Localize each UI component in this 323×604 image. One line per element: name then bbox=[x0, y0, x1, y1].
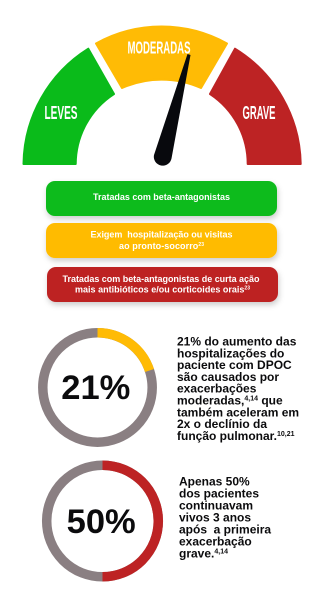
donut chart: 21% bbox=[43, 333, 152, 442]
text: grave bbox=[62, 274, 260, 294]
donut chart: 50% bbox=[47, 465, 158, 577]
text: 50% explanation: continuavam bbox=[179, 499, 253, 513]
gauge needle bbox=[154, 54, 190, 166]
text: 50% explanation bbox=[179, 475, 271, 560]
text: 21% explanation: que bbox=[258, 394, 283, 408]
value: 50%: 50% bbox=[67, 503, 136, 541]
text: 50% explanation: Apenas 50% bbox=[179, 475, 250, 489]
text: 21% explanation: também aceleram em bbox=[177, 405, 299, 419]
label: moderadas: MODERADAS bbox=[128, 38, 190, 58]
text: 21% explanation: moderadas, bbox=[177, 394, 244, 408]
text: grave: Tratadas com beta-antagonistas de curta ação bbox=[62, 274, 260, 284]
text: 21% explanation: são causados por bbox=[177, 370, 279, 384]
gauge segment: leves bbox=[24, 49, 114, 164]
gauge bbox=[24, 27, 301, 166]
text: moderadas: ao pronto-socorro bbox=[119, 241, 198, 251]
text: 21% explanation bbox=[177, 334, 299, 443]
text: 50% explanation: grave. bbox=[179, 546, 214, 560]
text: 21% explanation: 10,21 bbox=[277, 431, 295, 438]
label: grave: GRAVE bbox=[242, 102, 276, 123]
text: 21% explanation: paciente com DPOC bbox=[177, 358, 292, 372]
panel: moderadas description bbox=[46, 223, 277, 258]
gauge segment: moderadas bbox=[96, 27, 227, 88]
panel: grave description bbox=[47, 267, 278, 302]
text: 21% explanation: hospitalizações do bbox=[177, 346, 284, 360]
label: leves: LEVES bbox=[44, 102, 78, 123]
text: moderadas: Exigem hospitalização ou visitas bbox=[90, 230, 232, 240]
text: 50% explanation: dos pacientes bbox=[179, 487, 259, 501]
text: 50% explanation: 4,14 bbox=[214, 548, 228, 555]
text: grave: mais antibióticos e/ou corticoides orais bbox=[75, 284, 244, 294]
text: moderadas bbox=[90, 230, 232, 251]
text: 50% explanation: após a primeira bbox=[179, 522, 271, 536]
text: moderadas: 23 bbox=[198, 242, 204, 248]
value: 21%: 21% bbox=[61, 369, 130, 407]
text: 21% explanation: 21% do aumento das bbox=[177, 334, 297, 348]
text: 21% explanation: função pulmonar. bbox=[177, 429, 277, 443]
text: 21% explanation: 2x o declínio da bbox=[177, 417, 267, 431]
text: leves: Tratadas com beta-antagonistas bbox=[93, 192, 230, 202]
text: 50% explanation: exacerbação bbox=[179, 534, 252, 548]
text: 21% explanation: exacerbações bbox=[177, 382, 257, 396]
gauge segment: grave bbox=[210, 49, 301, 164]
panel: leves description bbox=[46, 181, 277, 216]
text: 21% explanation: 4,14 bbox=[244, 396, 258, 402]
text: grave: 23 bbox=[244, 286, 250, 292]
text: 50% explanation: vivos 3 anos bbox=[179, 510, 251, 524]
